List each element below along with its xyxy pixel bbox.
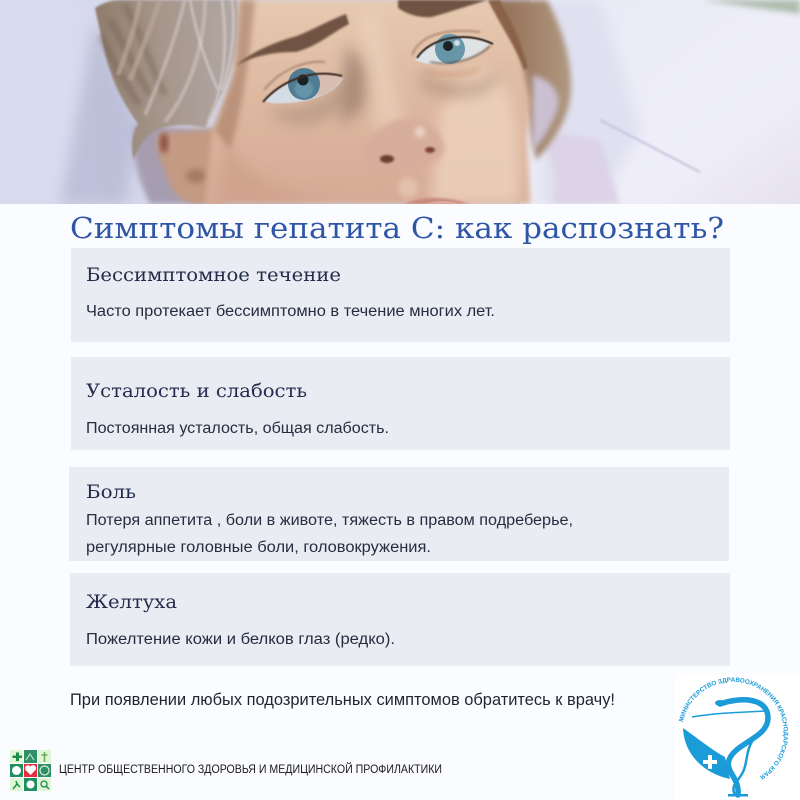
heading: fatigue: Усталость и слабость [86,381,307,402]
text: asymptomatic description: Часто протекает бессимптомно в течение многих лет. [86,303,495,320]
ear [157,128,225,204]
lips [405,198,470,204]
panel: fatigue and weakness [71,357,730,450]
icon: ministry of health logo: МИНИСТЕРСТВО ЗДРАВООХРАНЕНИЯ КРАСНОДАРСКОГО КРАЯ [678,677,788,780]
bowl crescent [683,728,730,779]
footer organisation name: ЦЕНТР ОБЩЕСТВЕННОГО ЗДОРОВЬЯ И МЕДИЦИНСКОЙ ПРОФИЛАКТИКИ [59,763,442,776]
photo: tired woman lying on a pillow [0,0,800,204]
left eye [263,75,343,103]
hair left [95,0,238,160]
right eye [415,38,490,64]
left brow [236,14,349,66]
callout: see a doctor: При появлении любых подозрительных симптомов обратитесь к врачу! [70,691,615,709]
snake [720,700,768,795]
text: jaundice description: Пожелтение кожи и белков глаз (редко). [86,631,395,648]
text: pain description line 1: Потеря аппетита , боли в животе, тяжесть в правом подреберье, [86,512,573,529]
heading: jaundice: Желтуха [86,592,177,613]
panel: jaundice [70,573,730,666]
title: Симптомы гепатита С: как распознать? [70,211,724,245]
panel: pain [69,467,729,561]
heading: asymptomatic: Бессимптомное течение [86,265,341,286]
heading: pain: Боль [86,482,136,503]
icon: public health centre logo [10,750,51,791]
face skin [205,0,530,204]
cross [703,755,717,769]
panel: asymptomatic course [71,248,730,342]
hair right [490,0,571,160]
bowl rim [692,711,766,717]
right brow [398,0,488,17]
text: fatigue description: Постоянная усталость, общая слабость. [86,420,389,437]
nose [378,119,446,162]
text: pain description line 2: регулярные головные боли, головокружения. [86,539,431,556]
under-eye and nose-side shadows [272,75,350,129]
stand [728,794,748,796]
neck shadow [133,125,215,204]
